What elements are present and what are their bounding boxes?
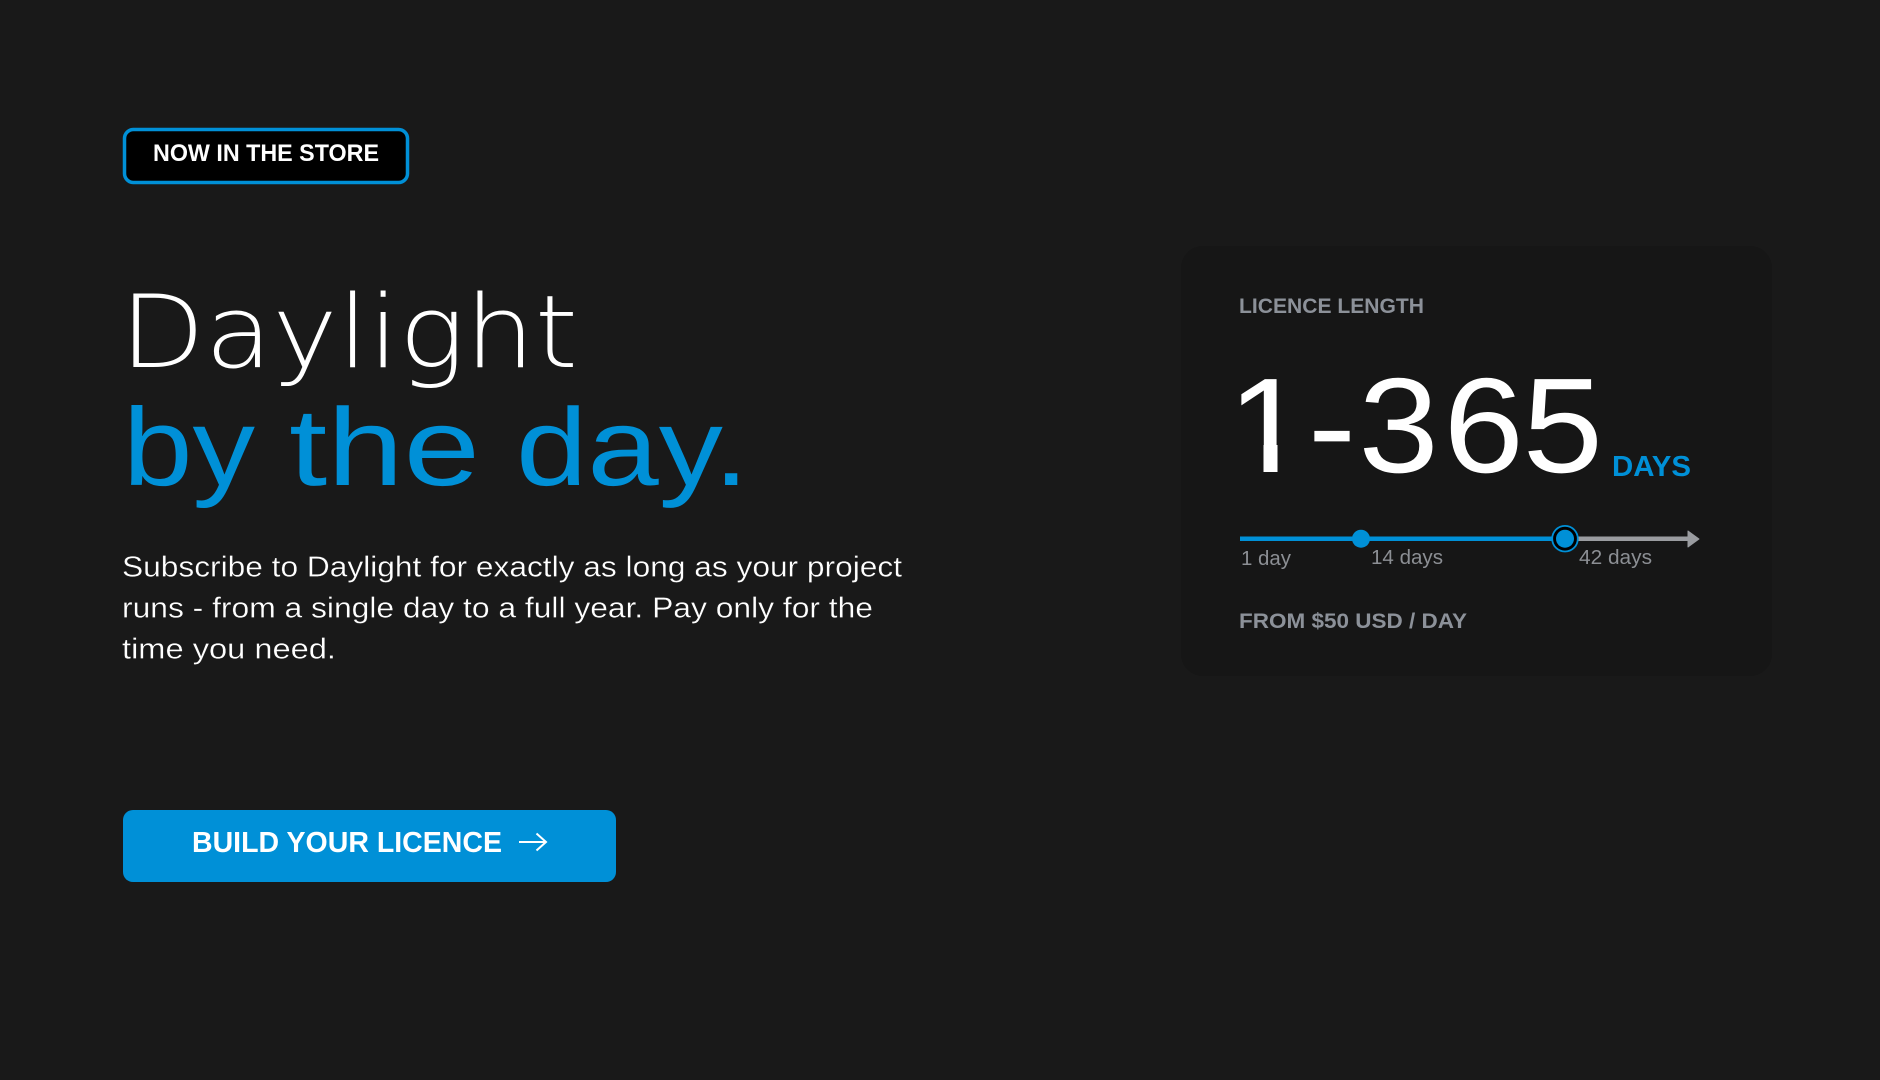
big number: 1-365 bbox=[1227, 349, 1603, 501]
badge: now in the store bbox=[124, 130, 408, 182]
unit: days: DAYS bbox=[1612, 451, 1691, 483]
slider labels: 14 days bbox=[1371, 547, 1443, 569]
badge: now in the store: NOW IN THE STORE bbox=[153, 140, 379, 167]
panel: licence length bbox=[1181, 246, 1772, 676]
price: FROM $50 USD / DAY bbox=[1239, 609, 1467, 633]
body text bbox=[122, 552, 902, 666]
marker: 14 days bbox=[1352, 530, 1370, 548]
title: Daylight bbox=[120, 273, 578, 391]
label: licence length: LICENCE LENGTH bbox=[1239, 294, 1424, 318]
button: build your licence: BUILD YOUR LICENCE bbox=[192, 827, 502, 859]
slider labels bbox=[1241, 547, 1652, 570]
title bbox=[120, 273, 749, 509]
button: build your licence bbox=[123, 810, 616, 882]
title: day. bbox=[516, 386, 749, 509]
marker: current position bbox=[1552, 526, 1578, 552]
slider labels: 1 day bbox=[1241, 548, 1291, 570]
slider labels: 42 days bbox=[1579, 547, 1652, 569]
slider bbox=[1240, 526, 1699, 570]
icon: arrow bbox=[519, 834, 546, 850]
title: the bbox=[289, 386, 480, 509]
body text: time you need. bbox=[122, 634, 336, 666]
body text: runs - from a single day to a full year. Pay only for the bbox=[122, 592, 873, 624]
body text: Subscribe to Daylight for exactly as long as your project bbox=[122, 552, 902, 584]
title: by bbox=[123, 386, 255, 509]
